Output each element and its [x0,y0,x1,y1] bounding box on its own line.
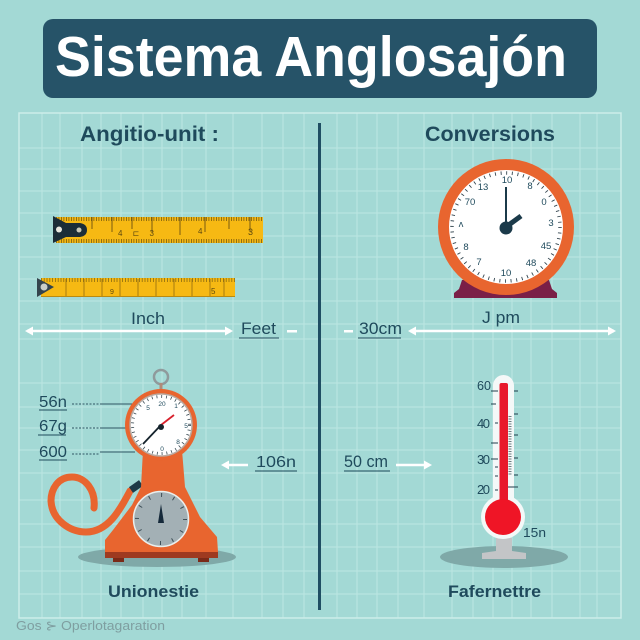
gauge value labels: 56n [39,394,67,411]
tape measure: upper [53,216,263,243]
icon: clock: 70 [465,197,475,208]
heading: left panel: Angitio-unit : [80,123,219,146]
icon: clock: 8 [527,181,533,192]
label: 30cm: 30cm [359,319,402,338]
thermometer scale [477,378,546,540]
thermometer scale: 60 [477,378,491,393]
panel: conversions [344,123,616,338]
tape measure: lower [37,278,235,297]
arrowhead: left pointing [221,460,229,470]
caption: left gauge: Unionestie [108,582,199,601]
heading: right panel: Conversions [425,123,555,146]
icon: gauge: 8 [176,439,180,446]
icon: clock: 0 [541,197,547,208]
tape measure: upper: 4 [198,227,203,236]
icon: clock: ʌ [459,219,464,230]
icon: clock: 10 [502,175,512,186]
icon: clock: 8 [463,242,469,253]
icon: clock [438,159,574,298]
gauge value labels [38,394,135,461]
icon: clock: 45 [541,241,551,252]
thermometer scale: 40 [477,416,490,431]
caption: thermometer: Fafernettre [448,582,541,601]
panel: pressure gauge [38,370,297,601]
title banner: Sistema Anglosajón [55,25,567,89]
panel: thermometer [344,375,568,601]
label: time: J pm [482,308,520,327]
icon: gauge: 5 [184,423,188,430]
center divider [318,123,321,610]
arrow: left pointing [228,464,248,466]
panel: length units [25,123,297,338]
dash: 30cm [344,330,353,332]
icon: gauge: 5 [146,405,150,412]
icon: gauge: 20 [158,401,166,408]
dash: feet [287,330,297,332]
arrow: right pointing [396,464,425,466]
arrow: inch span [27,330,231,332]
arrow: conversion span [410,330,614,332]
icon: gauge: 0 [160,446,164,453]
tape measure: lower: 5 [211,287,216,296]
arrowheads: conversion span [408,326,616,336]
icon: clock: 10 [501,268,511,279]
label: inch: Inch [131,309,165,328]
icon: clock: 13 [478,182,488,193]
label: 50 cm: 50 cm [344,452,388,471]
arrowhead: right pointing [424,460,432,470]
icon: clock: 3 [548,218,554,229]
tape measure: lower: 9 [110,289,114,296]
arrowheads: inch span [25,326,233,336]
icon: clock: 48 [526,258,536,269]
thermometer scale: 20 [477,482,490,497]
icon: thermometer [440,375,568,568]
thermometer scale: 30 [477,452,490,467]
thermometer scale: 15n [523,525,546,540]
icon: gauge [51,370,236,567]
icon: clock: 7 [476,257,482,268]
gauge value labels: 600 [39,444,67,461]
tape measure: upper: 4 ⊏ 3 [118,229,155,238]
footer credit: Gos ⊱ Operlotagaration [16,619,165,633]
label: feet: Feet [241,319,276,338]
label: 106n: 106n [256,454,296,471]
gauge value labels: 67g [39,418,67,435]
tape measure: upper: 3 [248,227,253,237]
icon: gauge: 1 [174,403,178,410]
